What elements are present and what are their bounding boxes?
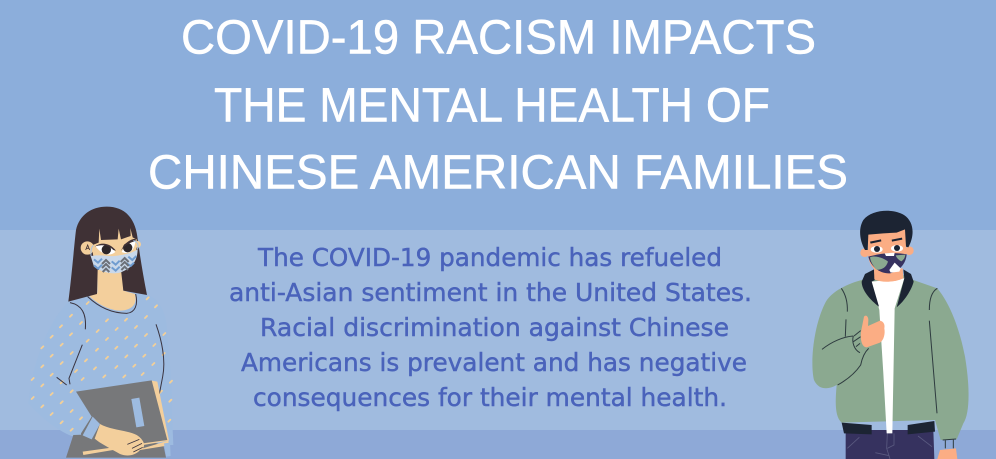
intro text block: anti-Asian sentiment in the United States. xyxy=(229,278,752,307)
waistband xyxy=(842,423,872,434)
tee shirt xyxy=(872,278,904,433)
jacket xyxy=(812,275,969,440)
intro text block: Americans is prevalent and has negative xyxy=(241,348,747,377)
mask pattern xyxy=(870,253,905,273)
folder xyxy=(76,380,167,452)
intro text block: The COVID-19 pandemic has refueled xyxy=(257,243,722,272)
title: COVID-19 RACISM IMPACTS xyxy=(181,12,816,64)
pen xyxy=(164,443,171,457)
folder back edge xyxy=(83,381,169,455)
title: THE MENTAL HEALTH OF xyxy=(214,80,770,132)
illustration: woman with mask holding a folder xyxy=(28,207,173,458)
intro text block xyxy=(229,243,752,412)
folder window xyxy=(131,398,144,427)
ear loops xyxy=(91,241,138,256)
face xyxy=(868,229,906,273)
cuff lines xyxy=(943,439,956,448)
sweater dots xyxy=(32,297,172,431)
jeans xyxy=(846,430,934,459)
thumbs up hand xyxy=(861,316,885,347)
title xyxy=(148,12,848,200)
brows and eyes xyxy=(870,238,902,244)
collar xyxy=(862,269,879,307)
intro text block: consequences for their mental health. xyxy=(253,383,727,412)
illustration: man with mask giving thumbs up xyxy=(812,211,969,459)
ears xyxy=(81,241,94,255)
hair xyxy=(860,211,913,250)
sleeve cuff xyxy=(83,417,100,439)
mask xyxy=(868,253,907,273)
ears xyxy=(860,248,869,257)
other hand xyxy=(937,448,957,459)
hand xyxy=(95,424,169,455)
neck xyxy=(874,268,903,282)
face xyxy=(92,228,137,272)
neckline xyxy=(88,294,137,313)
jacket lines xyxy=(822,288,937,413)
eyelids xyxy=(95,239,136,251)
sweater xyxy=(28,293,173,445)
title: CHINESE AMERICAN FAMILIES xyxy=(148,146,848,200)
intro text block: Racial discrimination against Chinese xyxy=(260,313,729,342)
eyes xyxy=(95,245,115,255)
lap shadow xyxy=(66,433,166,458)
hair xyxy=(68,207,147,302)
neck and chest xyxy=(89,270,136,311)
mask xyxy=(91,249,138,273)
ear detail xyxy=(86,245,90,250)
arm lines xyxy=(57,303,164,394)
